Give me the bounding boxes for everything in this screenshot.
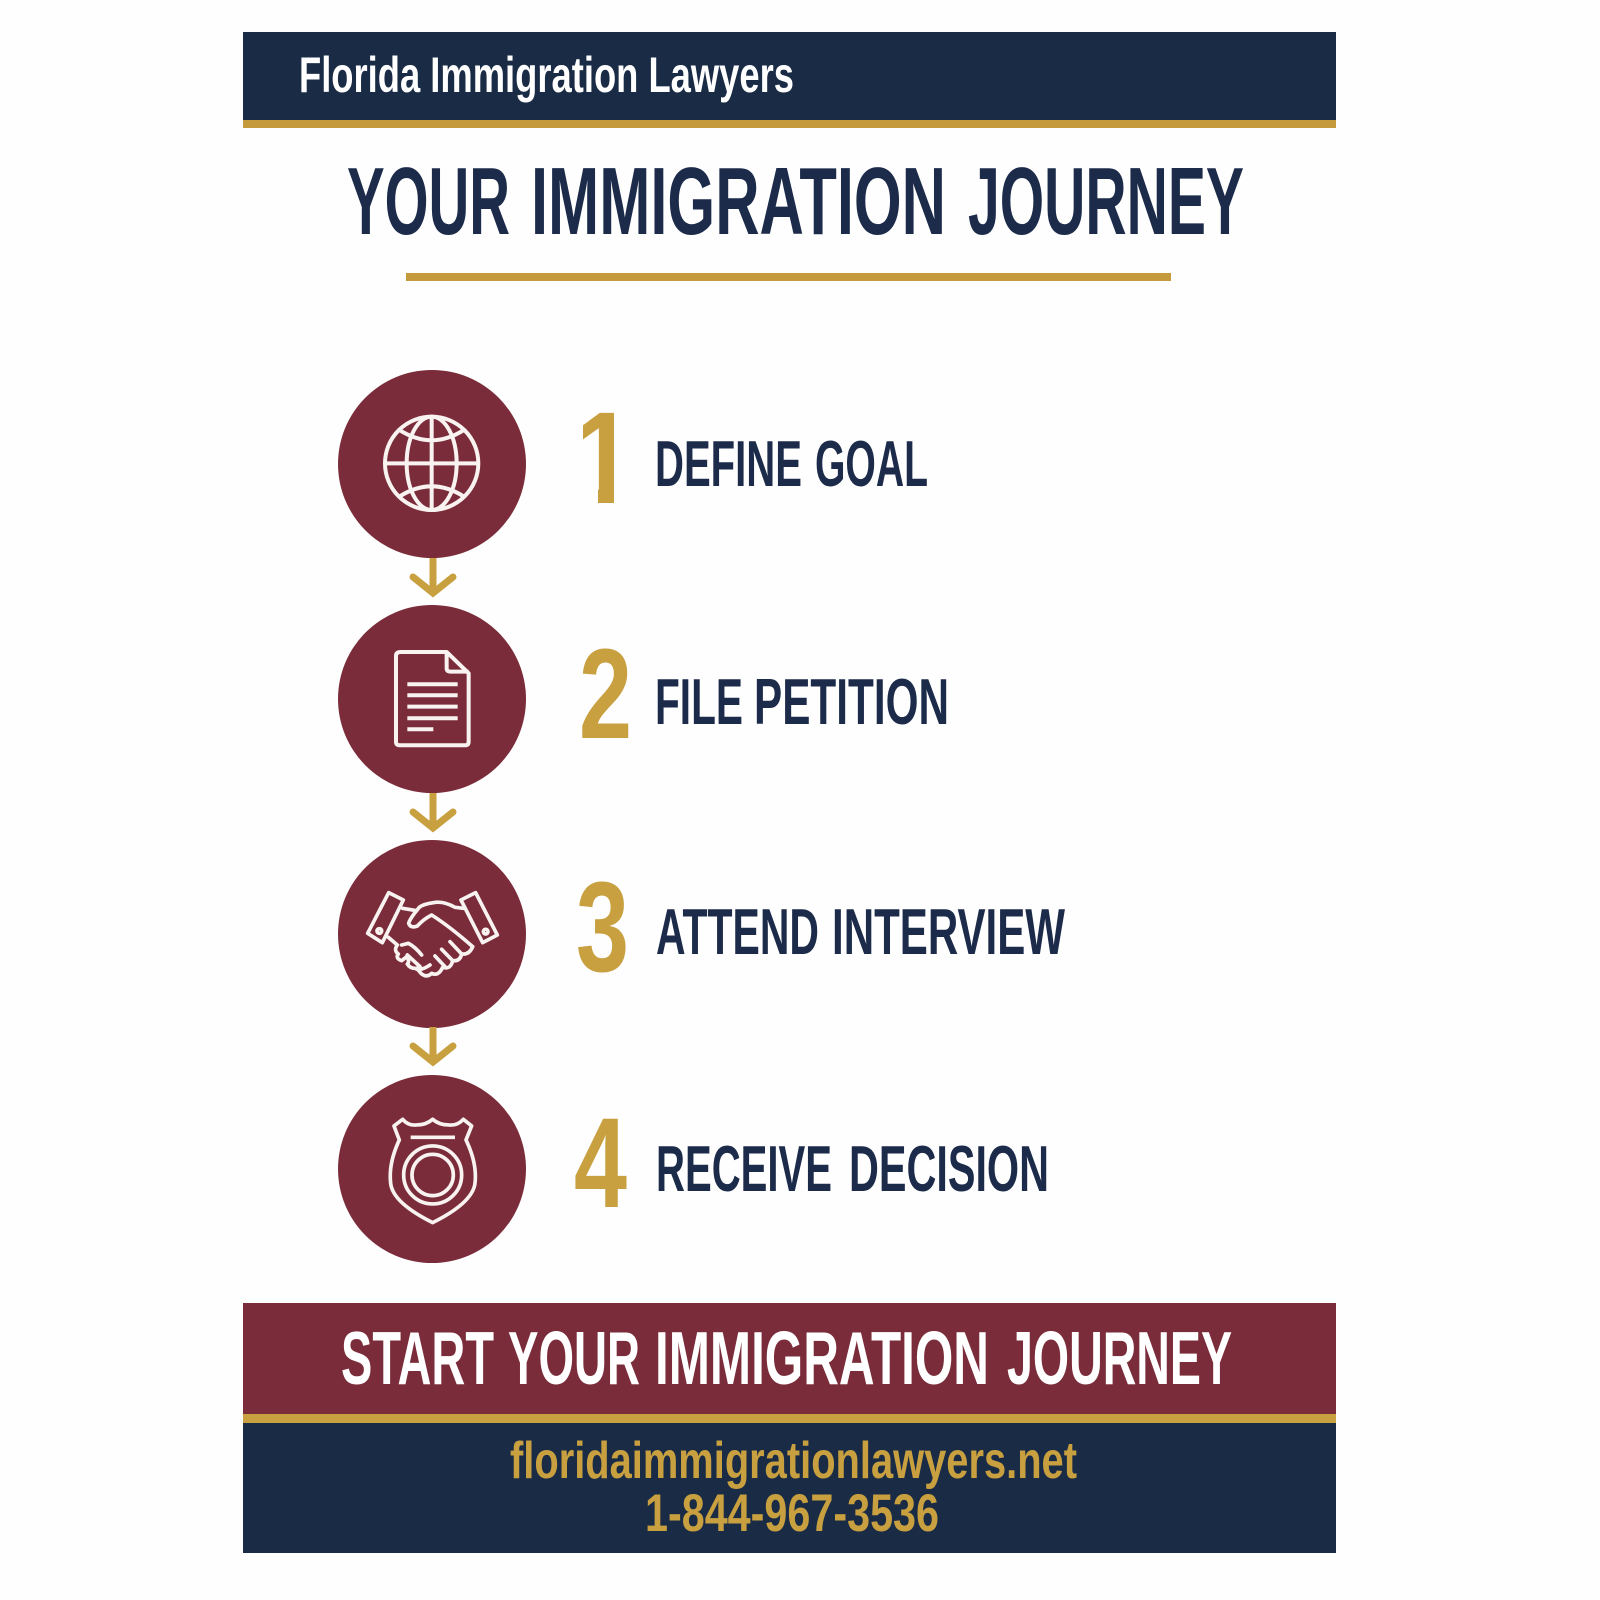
- arrow 2 to 3: [413, 793, 453, 829]
- header firm name: Florida Immigration Lawyers: [299, 47, 794, 103]
- call to action text: START: [341, 1316, 494, 1400]
- step 2 label: FILE: [655, 665, 743, 738]
- icon: handshake: [368, 893, 497, 976]
- step 1 label: DEFINE: [655, 427, 802, 500]
- step 2 number: 2: [579, 623, 632, 766]
- call to action text: IMMIGRATION: [655, 1316, 989, 1400]
- step 3: [338, 840, 1065, 1028]
- step 3 label: INTERVIEW: [832, 895, 1065, 968]
- step 2: [338, 605, 949, 793]
- step 1 circle: [338, 370, 526, 558]
- call to action band: [243, 1303, 1336, 1414]
- footer gold divider: [243, 1414, 1336, 1423]
- step 2 label: PETITION: [754, 665, 949, 738]
- phone number: 1-844-967-3536: [645, 1484, 939, 1543]
- step 3 number: 3: [576, 856, 629, 999]
- title: IMMIGRATION: [531, 148, 946, 255]
- step 4 circle: [338, 1075, 526, 1263]
- icon: globe: [385, 417, 478, 510]
- step 3 label: [656, 895, 1065, 968]
- icon: badge: [390, 1119, 475, 1223]
- call to action text: YOUR: [508, 1316, 640, 1400]
- step 1 number: 1: [572, 384, 636, 531]
- title underline: [406, 273, 1171, 281]
- icon: document: [396, 652, 469, 745]
- arrow 1 to 2: [413, 558, 453, 594]
- title: JOURNEY: [968, 148, 1244, 255]
- footer contact band: [243, 1423, 1336, 1553]
- step 4 label: DECISION: [849, 1132, 1049, 1205]
- header band: [243, 32, 1336, 128]
- step 2 label: [655, 665, 949, 738]
- step 2 circle: [338, 605, 526, 793]
- step 4 number: 4: [574, 1092, 627, 1235]
- arrow 3 to 4: [413, 1027, 453, 1063]
- step 4: [338, 1075, 1049, 1263]
- website: floridaimmigrationlawyers.net: [510, 1432, 1077, 1490]
- step 1: [338, 370, 928, 558]
- call to action text: JOURNEY: [1007, 1316, 1232, 1400]
- call to action text: [341, 1316, 1232, 1400]
- step 1 label: GOAL: [815, 427, 928, 500]
- step 4 label: RECEIVE: [656, 1132, 832, 1205]
- step 3 label: ATTEND: [656, 895, 819, 968]
- step 3 circle: [338, 840, 526, 1028]
- title: YOUR: [347, 148, 510, 255]
